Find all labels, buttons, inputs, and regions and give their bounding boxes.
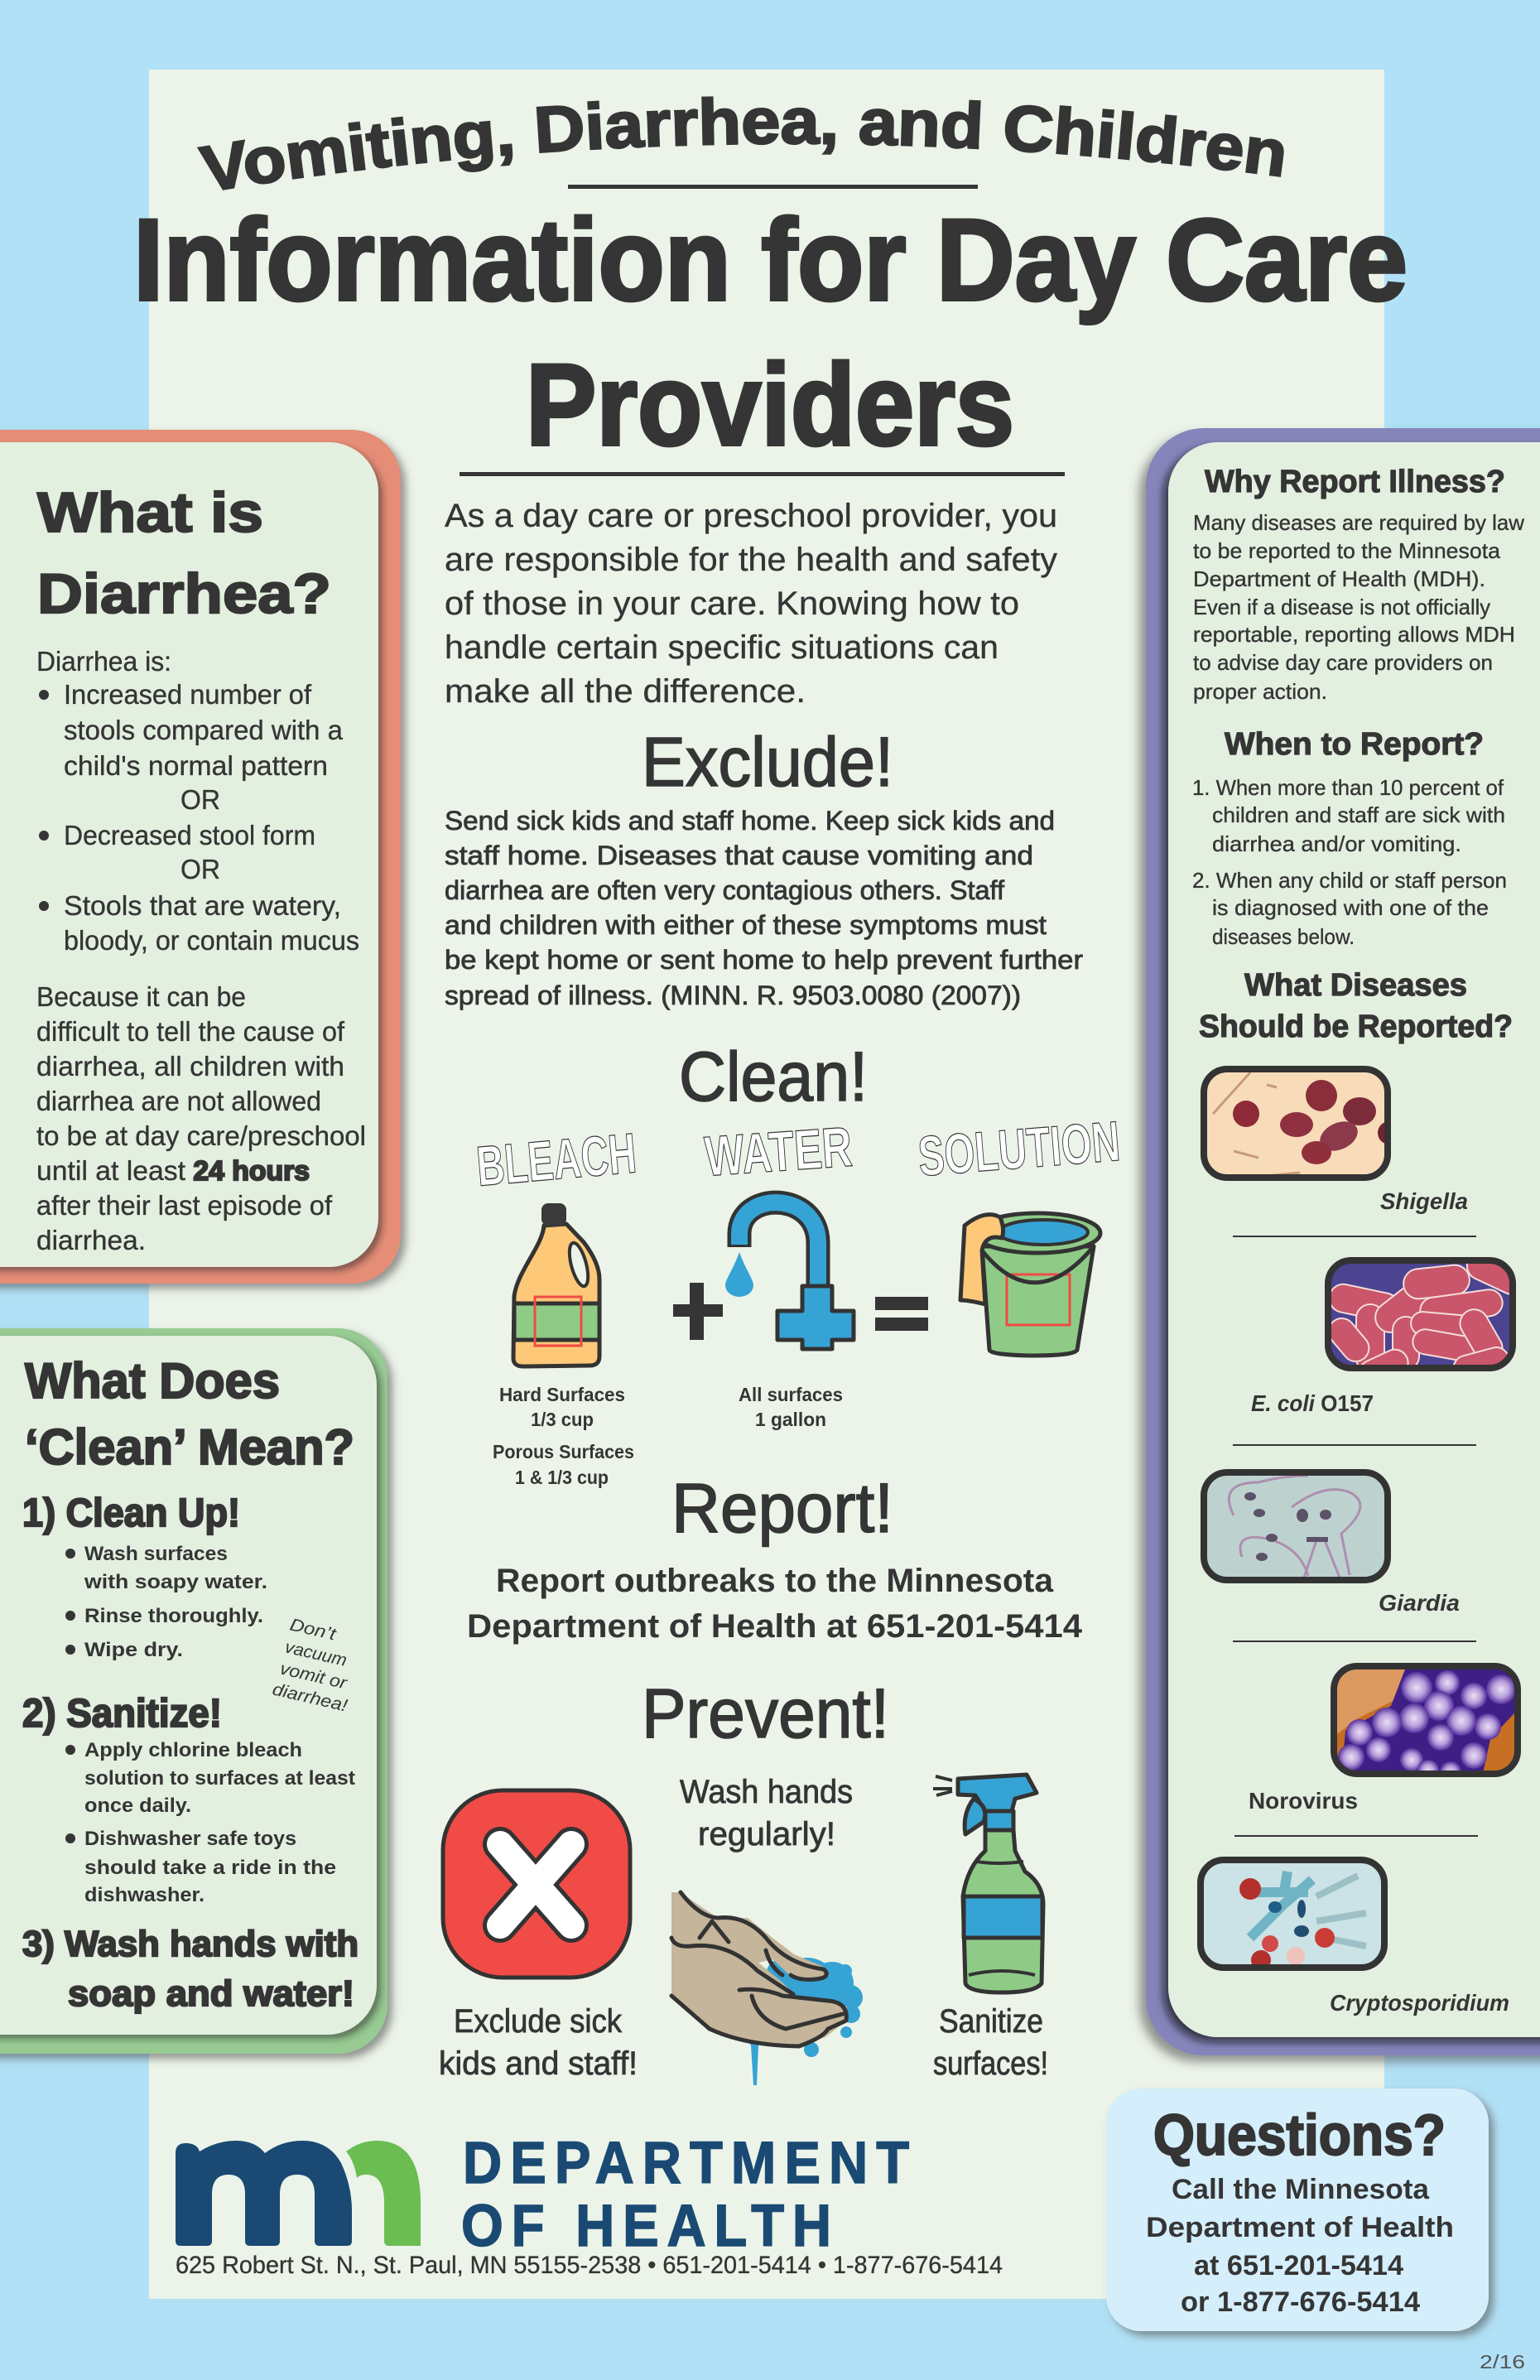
- photo: e. coli: [1325, 1257, 1516, 1371]
- word art: solution: SOLUTION: [916, 1110, 1122, 1188]
- step 3: wash hands: 3) Wash hands with: [22, 1924, 359, 1964]
- step 2: sanitize: should take a ride in the: [84, 1857, 336, 1879]
- section: exclude: diarrhea are often very contagious others. Staff: [445, 875, 1004, 905]
- caption: sanitize surfaces: [933, 2003, 1048, 2082]
- center panel: [149, 70, 1384, 2299]
- logo: minnesota department of health: [176, 2131, 909, 2259]
- section: why report illness: [1193, 465, 1524, 704]
- panel: report illness: [1146, 428, 1540, 2055]
- diarrhea definition list: child's normal pattern: [64, 750, 328, 781]
- callout: questions: [1106, 2089, 1489, 2331]
- section: when to report: 2. When any child or staff person: [1192, 868, 1507, 893]
- 24 hour exclusion paragraph: after their last episode of: [36, 1190, 333, 1221]
- heading: what is diarrhea: What is: [37, 481, 263, 544]
- step 1: clean up: [22, 1491, 267, 1661]
- caption: wash hands regularly: Wash hands: [680, 1774, 853, 1810]
- heading: what diseases should be reported: [1199, 968, 1513, 1044]
- logo wordmark: OF HEALTH: [461, 2194, 831, 2259]
- heading: what is diarrhea: [37, 481, 331, 625]
- section: why report illness: Why Report Illness?: [1205, 465, 1505, 499]
- label: norovirus: Norovirus: [1249, 1788, 1358, 1814]
- section: report: [467, 1469, 1083, 1645]
- diarrhea definition list: Increased number of: [64, 679, 312, 710]
- section: why report illness: proper action.: [1193, 679, 1327, 704]
- diarrhea definition list: Stools that are watery,: [64, 890, 341, 921]
- icon: equals: [875, 1297, 928, 1331]
- footer address: 625 Robert St. N., St. Paul, MN 55155-2538 • 651-201-5414 • 1-877-676-5414: [176, 2252, 1003, 2279]
- callout: questions: Department of Health: [1146, 2212, 1454, 2243]
- date code: 2/16: [1480, 2351, 1525, 2373]
- diarrhea definition list: stools compared with a: [64, 715, 344, 745]
- 24 hour exclusion paragraph: Because it can be: [36, 981, 246, 1012]
- intro paragraph: make all the difference.: [445, 673, 806, 710]
- diarrhea definition list: [36, 646, 359, 956]
- note: don't vacuum: vomit or: [278, 1659, 349, 1693]
- captions: water amount: All surfaces: [739, 1384, 843, 1405]
- intro paragraph: [445, 498, 1057, 710]
- captions: bleach amounts: 1 & 1/3 cup: [515, 1467, 609, 1488]
- diarrhea definition list: OR: [180, 784, 220, 815]
- photo: norovirus: [1331, 1663, 1521, 1783]
- intro paragraph: are responsible for the health and safety: [445, 542, 1057, 578]
- step 2: sanitize: 2) Sanitize!: [22, 1692, 222, 1736]
- captions: bleach amounts: 1/3 cup: [531, 1409, 594, 1430]
- section: when to report: [1192, 727, 1507, 949]
- heading: what diseases should be reported: What Diseases: [1244, 968, 1467, 1003]
- callout: questions: Questions?: [1153, 2103, 1446, 2167]
- section: when to report: diseases below.: [1212, 924, 1355, 949]
- photo: giardia: [1201, 1469, 1391, 1583]
- callout: questions: Call the Minnesota: [1172, 2174, 1430, 2205]
- 24 hour exclusion paragraph: diarrhea, all children with: [36, 1051, 344, 1082]
- captions: bleach amounts: [493, 1384, 634, 1488]
- label: giardia: Giardia: [1379, 1590, 1460, 1616]
- label: e. coli o157: E. coli O157: [1251, 1390, 1374, 1416]
- 24 hour exclusion paragraph: difficult to tell the cause of: [36, 1016, 345, 1047]
- captions: bleach amounts: Porous Surfaces: [493, 1441, 634, 1462]
- heading: what does clean mean: ‘Clean’ Mean?: [25, 1419, 354, 1475]
- label: cryptosporidium: Cryptosporidium: [1330, 1990, 1509, 2016]
- section: why report illness: Department of Health (MDH).: [1193, 566, 1485, 591]
- heading: what does clean mean: What Does: [25, 1353, 280, 1409]
- word art: bleach: BLEACH: [474, 1121, 639, 1198]
- title: information for day care providers: [133, 195, 1408, 476]
- icon: exclude x: [443, 1790, 630, 1978]
- logo wordmark: [461, 2131, 909, 2259]
- section: why report illness: reportable, reporting allows MDH: [1193, 622, 1515, 647]
- section: when to report: 1. When more than 10 percent of: [1192, 775, 1504, 800]
- section: when to report: diarrhea and/or vomiting.: [1212, 831, 1461, 856]
- step 1: clean up: Rinse thoroughly.: [84, 1605, 263, 1627]
- note: don't vacuum: [271, 1615, 349, 1716]
- captions: bleach amounts: Hard Surfaces: [499, 1384, 625, 1405]
- step 2: sanitize: [22, 1692, 355, 1906]
- icon: spray bottle: [933, 1775, 1043, 1992]
- section: exclude: be kept home or sent home to help prevent further: [445, 945, 1083, 975]
- icon: washing hands: [671, 1892, 863, 2085]
- callout: questions: or 1-877-676-5414: [1181, 2286, 1420, 2318]
- 24 hour exclusion paragraph: to be at day care/preschool: [36, 1120, 366, 1151]
- caption: exclude sick kids and staff: [439, 2003, 638, 2082]
- heading: prevent: Prevent!: [642, 1674, 889, 1752]
- intro paragraph: of those in your care. Knowing how to: [445, 585, 1019, 622]
- step 2: sanitize: once daily.: [84, 1795, 191, 1817]
- section: when to report: children and staff are sick with: [1212, 802, 1505, 827]
- caption: exclude sick kids and staff: Exclude sick: [454, 2003, 623, 2040]
- section: exclude: and children with either of these symptoms must: [445, 910, 1047, 940]
- section: exclude: Send sick kids and staff home. Keep sick kids and: [445, 806, 1055, 836]
- icon: bleach bottle: [513, 1203, 599, 1366]
- 24 hour exclusion paragraph: until at least 24 hours: [36, 1155, 310, 1186]
- step 2: sanitize: dishwasher.: [84, 1884, 205, 1906]
- section: why report illness: to advise day care providers on: [1193, 650, 1493, 675]
- captions: water amount: [739, 1384, 843, 1430]
- icon: plus: [673, 1283, 723, 1340]
- heading: what is diarrhea: Diarrhea?: [37, 562, 331, 625]
- 24 hour exclusion paragraph: [36, 981, 366, 1255]
- step 1: clean up: with soapy water.: [84, 1571, 267, 1593]
- icon: bucket with towel: [960, 1213, 1100, 1356]
- 24 hour exclusion paragraph: diarrhea are not allowed: [36, 1086, 321, 1116]
- caption: sanitize surfaces: surfaces!: [933, 2045, 1048, 2082]
- title: vomiting, diarrhea, and children: Vomiting, Diarrhea, and Children: [197, 96, 1284, 190]
- section: report: Report outbreaks to the Minnesota: [496, 1563, 1054, 1599]
- captions: water amount: 1 gallon: [755, 1409, 826, 1430]
- section: when to report: is diagnosed with one of the: [1212, 895, 1489, 920]
- logo mark: [176, 2141, 421, 2246]
- step 2: sanitize: Dishwasher safe toys: [84, 1828, 296, 1850]
- step 2: sanitize: Apply chlorine bleach: [84, 1739, 302, 1761]
- caption: exclude sick kids and staff: kids and staff!: [439, 2045, 638, 2082]
- step 2: sanitize: solution to surfaces at least: [84, 1767, 355, 1790]
- step 1: clean up: 1) Clean Up!: [22, 1491, 240, 1535]
- note: don't vacuum: Don’t: [288, 1615, 339, 1645]
- diarrhea definition list: bloody, or contain mucus: [64, 925, 359, 956]
- note: don't vacuum: vacuum: [283, 1637, 349, 1670]
- caption: wash hands regularly: regularly!: [698, 1816, 835, 1852]
- section: report: Department of Health at 651-201-5414: [467, 1608, 1083, 1645]
- section: exclude: spread of illness. (MINN. R. 9503.0080 (2007)): [445, 980, 1021, 1010]
- section: why report illness: to be reported to the Minnesota: [1193, 538, 1501, 563]
- label: shigella: Shigella: [1380, 1188, 1468, 1214]
- photo: shigella: [1201, 1066, 1401, 1181]
- panel: what is diarrhea: [0, 430, 401, 1284]
- heading: what diseases should be reported: Should be Reported?: [1199, 1009, 1513, 1044]
- diarrhea definition list: Decreased stool form: [64, 820, 315, 850]
- section: exclude: staff home. Diseases that cause vomiting and: [445, 841, 1033, 870]
- section: why report illness: Many diseases are required by law: [1193, 510, 1524, 535]
- caption: wash hands regularly: [680, 1774, 853, 1852]
- heading: clean: Clean!: [679, 1038, 868, 1115]
- section: exclude: [445, 723, 1083, 1010]
- section: why report illness: Even if a disease is not officially: [1193, 595, 1490, 619]
- note: don't vacuum: diarrhea!: [271, 1679, 349, 1716]
- step 1: clean up: Wash surfaces: [84, 1543, 228, 1565]
- 24 hour exclusion paragraph: diarrhea.: [36, 1225, 146, 1255]
- word art: water: WATER: [703, 1115, 854, 1188]
- section: exclude: Exclude!: [642, 723, 893, 801]
- intro paragraph: As a day care or preschool provider, you: [445, 498, 1057, 534]
- step 3: wash hands: [22, 1924, 359, 2014]
- callout: questions: at 651-201-5414: [1194, 2250, 1403, 2281]
- icon: faucet: [725, 1202, 854, 1349]
- section: when to report: When to Report?: [1225, 727, 1484, 762]
- intro paragraph: handle certain specific situations can: [445, 629, 999, 666]
- panel: what does clean mean: [0, 1328, 387, 2054]
- logo wordmark: DEPARTMENT: [463, 2131, 909, 2196]
- step 1: clean up: Wipe dry.: [84, 1639, 183, 1661]
- heading: what does clean mean: [25, 1353, 354, 1475]
- title: information for day care providers: Information for Day Care: [133, 195, 1408, 325]
- diarrhea definition list: OR: [180, 854, 220, 884]
- photo: cryptosporidium: [1197, 1857, 1388, 1971]
- step 3: wash hands: soap and water!: [68, 1973, 354, 2014]
- section: report: Report!: [671, 1469, 893, 1547]
- title: information for day care providers: Providers: [526, 340, 1014, 470]
- diarrhea definition list: Diarrhea is:: [36, 646, 171, 677]
- caption: sanitize surfaces: Sanitize: [939, 2003, 1043, 2040]
